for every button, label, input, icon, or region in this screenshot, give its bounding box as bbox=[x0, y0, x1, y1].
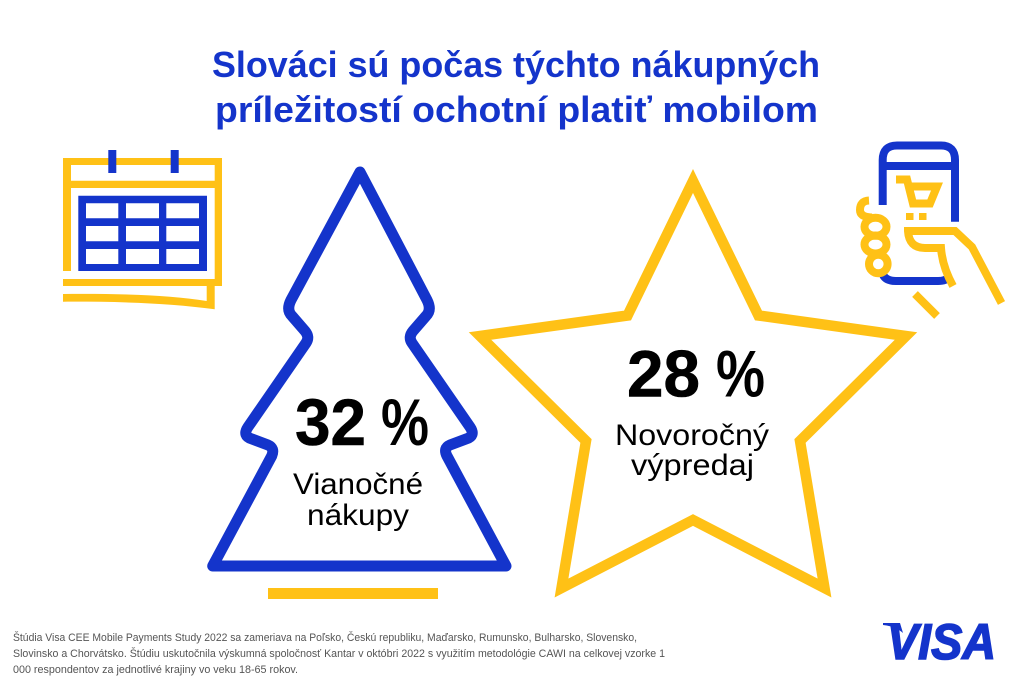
title: príležitostí ochotní platiť mobilom bbox=[215, 89, 818, 130]
footnote: Slovinsko a Chorvátsko. Štúdiu uskutočnila výskumná spoločnosť Kantar v októbri 2022 s využitím metodológie CAWI na celkovej vzorke 1 bbox=[13, 647, 665, 660]
tree stand bbox=[268, 588, 438, 599]
footnote: Štúdia Visa CEE Mobile Payments Study 2022 sa zameriava na Poľsko, Českú republiku, Maďarsko, Rumunsko, Bulharsko, Slovensko, bbox=[13, 631, 637, 644]
footnote bbox=[13, 631, 665, 676]
icon: calendar bbox=[63, 150, 222, 309]
icon: phone with shopping cart in hand bbox=[860, 146, 1002, 316]
footnote: 000 respondentov za jednotlivé krajiny vo veku 18-65 rokov. bbox=[13, 664, 298, 676]
value: 32 % bbox=[295, 385, 429, 459]
label: Novoročný výpredaj: výpredaj bbox=[631, 449, 754, 482]
label: Vianočné nákupy: nákupy bbox=[307, 499, 409, 532]
panel: Christmas tree bbox=[213, 172, 506, 599]
panel: star bbox=[480, 181, 906, 588]
value: 32 %: 32 bbox=[295, 385, 366, 459]
logo: VISA: VISA bbox=[887, 614, 996, 670]
value: 32 %: % bbox=[381, 385, 429, 459]
title bbox=[212, 44, 820, 130]
label: Vianočné nákupy: Vianočné bbox=[293, 468, 423, 501]
value: 28 % bbox=[627, 336, 765, 410]
value: 28 %: % bbox=[716, 336, 765, 410]
value: 28 %: 28 bbox=[627, 336, 700, 410]
star outline bbox=[480, 181, 906, 588]
label: Novoročný výpredaj bbox=[615, 419, 769, 482]
tree outline bbox=[213, 172, 506, 566]
label: Vianočné nákupy bbox=[293, 468, 423, 532]
label: Novoročný výpredaj: Novoročný bbox=[615, 419, 769, 452]
title: Slováci sú počas týchto nákupných bbox=[212, 44, 820, 85]
